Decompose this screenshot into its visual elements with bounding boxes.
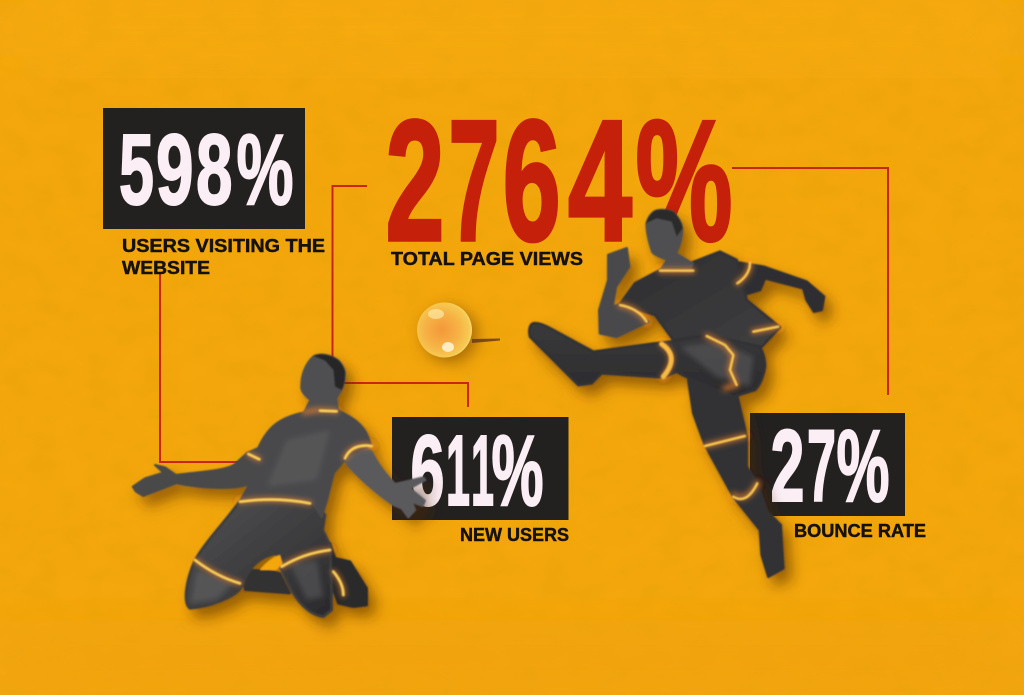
back calf xyxy=(242,570,290,593)
value 27%: % xyxy=(836,409,890,523)
value 611%: 1 xyxy=(446,415,470,527)
shirt xyxy=(620,252,780,347)
leg highlights xyxy=(190,570,233,603)
value 27%: 2 xyxy=(770,409,804,523)
ball trail xyxy=(472,338,500,343)
connector lines xyxy=(160,168,888,462)
value 2764%: 6 xyxy=(503,85,561,277)
neck and head xyxy=(646,209,693,272)
value 598%: % xyxy=(236,114,294,226)
gap between legs xyxy=(260,555,283,570)
raised fist arm xyxy=(599,248,648,337)
label bounce rate: BOUNCE RATE xyxy=(794,521,926,541)
label new users: NEW USERS xyxy=(460,525,569,545)
stat: 2764% total page views xyxy=(386,85,732,277)
stat box 611% xyxy=(392,417,568,520)
value 611%: 6 xyxy=(410,415,444,527)
label total page views: TOTAL PAGE VIEWS xyxy=(391,249,583,269)
hair xyxy=(646,209,683,237)
value 2764%: 4 xyxy=(568,85,632,277)
figure: kneeling player celebrating xyxy=(133,354,425,617)
glow seams xyxy=(620,263,778,499)
value 2764%: 7 xyxy=(448,85,500,277)
label users visiting the website: USERS VISITING THE xyxy=(122,236,325,256)
value 598%: 5 xyxy=(119,114,154,226)
right arm and hand xyxy=(345,448,425,517)
raised leg and foot xyxy=(529,323,765,397)
stat: 598% users visiting the website xyxy=(103,108,325,278)
icon: glowing ball xyxy=(417,302,500,362)
value 2764%: 2 xyxy=(386,85,444,277)
value 27%: 7 xyxy=(807,409,836,523)
neck and head xyxy=(301,354,345,412)
value 611%: 1 xyxy=(471,415,494,527)
shirt xyxy=(240,411,371,517)
left arm and hand xyxy=(133,453,257,496)
ball xyxy=(417,302,472,358)
glow seams xyxy=(195,410,372,595)
ball shadow xyxy=(423,308,477,362)
value 598%: 9 xyxy=(156,114,194,226)
shirt highlights xyxy=(267,430,330,487)
stat: 611% new users xyxy=(392,415,569,545)
back foot xyxy=(330,543,367,607)
value 2764%: % xyxy=(636,85,732,277)
value 598%: 8 xyxy=(196,114,232,226)
back arm xyxy=(733,262,824,312)
stat box 598% xyxy=(103,108,305,229)
figure: player kicking xyxy=(529,209,824,577)
stat: 27% bounce rate xyxy=(750,409,926,541)
hair xyxy=(313,354,345,390)
standing leg and foot xyxy=(688,380,783,577)
stat box 27% xyxy=(750,413,905,516)
shorts and legs xyxy=(186,502,332,617)
value 611%: % xyxy=(492,415,544,527)
label users visiting the website: WEBSITE xyxy=(122,258,210,278)
ball highlight xyxy=(442,342,454,352)
shorts highlights xyxy=(680,342,753,387)
